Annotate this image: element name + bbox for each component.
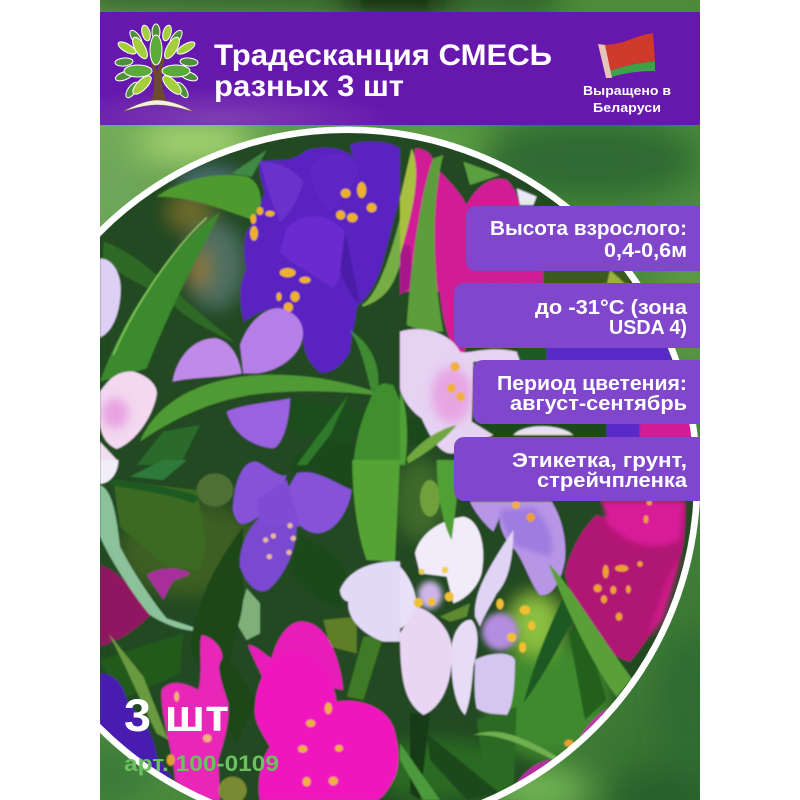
white circle ring bbox=[100, 126, 700, 800]
upright leaf bbox=[352, 460, 400, 562]
panel: package contents bbox=[454, 437, 700, 501]
white flower upper petal bbox=[415, 517, 483, 603]
logo: tree bbox=[114, 24, 199, 112]
foliage between panels bbox=[422, 271, 692, 441]
crimson flower bbox=[565, 500, 685, 662]
title: разных 3 шт bbox=[214, 70, 404, 103]
small diagonal leaf bbox=[407, 425, 457, 463]
panel: hardiness: USDA 4) bbox=[609, 317, 687, 339]
upper right flowers and leaves bbox=[400, 148, 700, 465]
pale pink flower bbox=[400, 329, 520, 454]
dark purple flowers bbox=[241, 141, 400, 373]
centre of white flower bbox=[414, 567, 454, 609]
upright green leaf bbox=[407, 155, 443, 332]
dark crossing leaf bbox=[103, 242, 235, 343]
icon: Belarus flag bbox=[598, 33, 655, 78]
grown in Belarus caption: Беларуси bbox=[593, 100, 661, 115]
pale flower on edge bbox=[100, 258, 121, 338]
grown in Belarus caption: Выращено в bbox=[583, 83, 671, 98]
panel: package contents: стрейчпленка bbox=[537, 470, 688, 492]
leaf highlight bbox=[113, 218, 207, 355]
lilac flower bbox=[470, 501, 565, 595]
broad top leaf bbox=[157, 175, 261, 222]
purple flower bbox=[233, 462, 352, 591]
white flower lower petal bbox=[400, 607, 452, 715]
curved leaf bbox=[350, 330, 378, 392]
header banner bbox=[100, 12, 700, 125]
panel: hardiness: до -31°С (зона bbox=[535, 297, 688, 319]
lilac petals bbox=[173, 308, 303, 448]
pale patch bbox=[237, 588, 260, 640]
panel: package contents: Этикетка, грунт, bbox=[512, 450, 687, 472]
small magenta petals bbox=[517, 707, 613, 783]
olive leaves bbox=[100, 460, 233, 700]
panel: flowering period: август-сентябрь bbox=[510, 393, 687, 415]
bright green stems bbox=[400, 480, 607, 800]
pale white petal bbox=[340, 562, 400, 642]
grown in Belarus caption bbox=[583, 83, 671, 115]
magenta flower bbox=[400, 148, 543, 358]
upright leaf bbox=[353, 383, 400, 465]
thin leaf bbox=[108, 633, 168, 740]
product card bbox=[100, 0, 700, 800]
pale teal leaf bbox=[100, 484, 194, 632]
panel: flowering period bbox=[473, 360, 700, 424]
pale pink flower bbox=[100, 372, 157, 465]
panel: height: Высота взрослого: bbox=[490, 218, 687, 240]
article number: арт. 100-0109 bbox=[124, 751, 279, 776]
upper left flowers and leaves bbox=[100, 141, 400, 465]
upper green patch bbox=[463, 162, 500, 185]
big dark leaf bbox=[190, 527, 257, 743]
soft foliage backdrop bbox=[100, 120, 700, 800]
panel: hardiness bbox=[454, 283, 700, 348]
lower left flowers and leaves bbox=[100, 460, 400, 800]
bud bbox=[219, 777, 247, 800]
flower scene bbox=[100, 120, 700, 800]
pale flower corner bbox=[100, 460, 118, 484]
dark lower leaves bbox=[137, 395, 363, 465]
leaf over crimson bbox=[548, 563, 632, 697]
leaf blade over stems bbox=[473, 732, 560, 760]
big pink flower bbox=[248, 622, 398, 800]
second white flower bbox=[451, 530, 535, 715]
purple flower, bottom left bbox=[100, 673, 172, 800]
small pink flower bbox=[162, 635, 229, 800]
green leaf on right bbox=[362, 218, 400, 307]
quantity label: 3 шт bbox=[124, 690, 229, 741]
title: Традесканция СМЕСЬ bbox=[214, 39, 552, 72]
panel: height bbox=[466, 206, 700, 271]
long diagonal leaf bbox=[100, 212, 220, 382]
stalks bbox=[323, 617, 383, 700]
thin top leaf bbox=[232, 150, 267, 177]
yellow-green leaf bbox=[400, 148, 416, 255]
dark magenta flower bbox=[100, 565, 190, 647]
dark leaf beside purple flower bbox=[338, 594, 339, 595]
lower right flowers and leaves bbox=[400, 460, 685, 800]
panel: flowering period: Период цветения: bbox=[497, 373, 687, 395]
leaf under pale flower bbox=[400, 392, 407, 465]
title bbox=[214, 39, 552, 103]
white flower stem leaf bbox=[437, 460, 457, 540]
panel: height: 0,4-0,6м bbox=[604, 240, 687, 262]
white petal near ring bbox=[517, 188, 537, 205]
long horizontal leaf bbox=[140, 375, 388, 442]
circular flower photo bbox=[100, 126, 700, 800]
white flower left petal bbox=[400, 567, 417, 628]
